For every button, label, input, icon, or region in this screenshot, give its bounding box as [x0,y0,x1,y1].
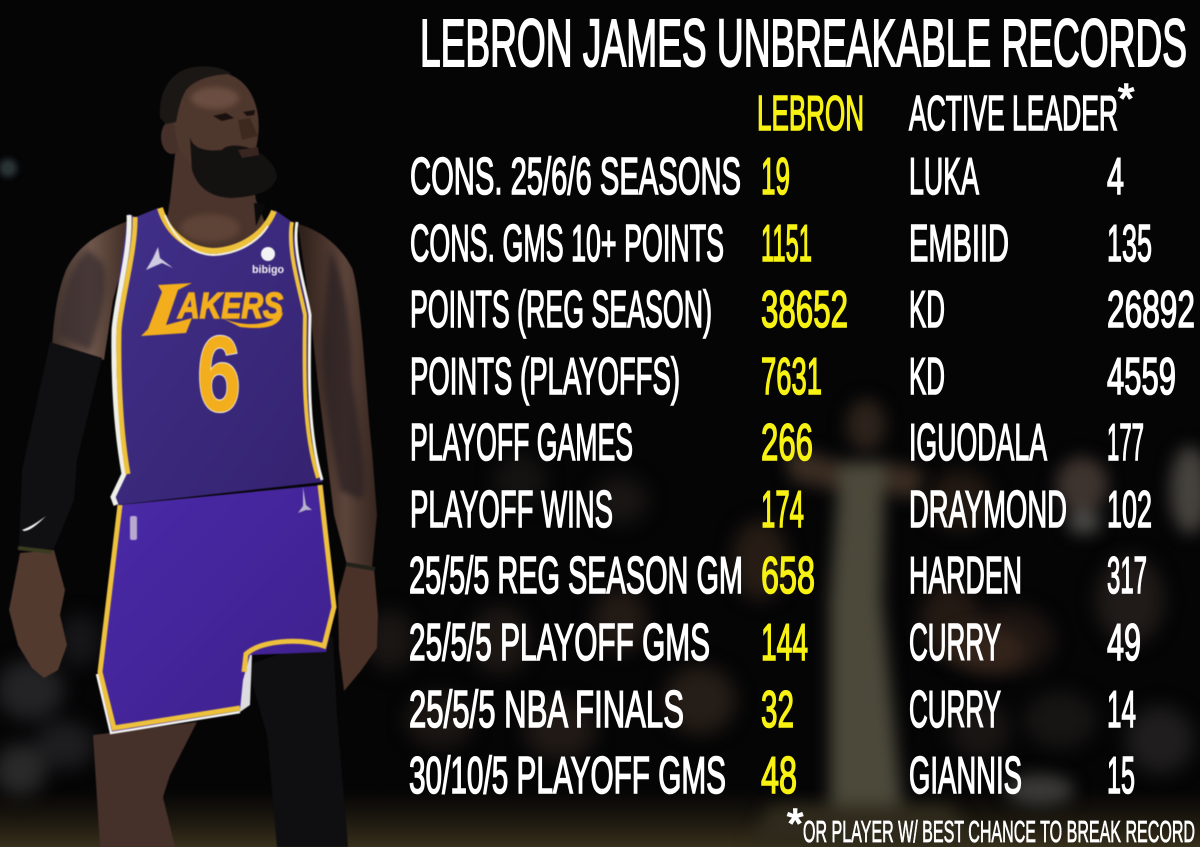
bibigo sponsor logo [252,247,284,276]
row: 30/10/5 playoff gms: GIANNIS [909,747,1022,805]
column header: lebron: LEBRON [757,87,864,141]
row: points (reg season): POINTS (REG SEASON) [410,281,712,339]
row: 25/5/5 nba finals [409,681,1136,739]
chest highlight [180,214,240,242]
mouth [238,147,259,158]
row: cons. gms 10+ points: 135 [1107,215,1152,273]
row: 25/5/5 nba finals: 14 [1107,681,1136,739]
row: cons. 25/6/6 seasons: LUKA [909,148,979,206]
row: playoff wins: 174 [761,481,804,539]
row: 25/5/5 reg season gm: 25/5/5 REG SEASON GM [409,547,743,605]
row: 25/5/5 playoff gms: 49 [1107,614,1141,672]
footnote: * [787,800,803,847]
text: 15 [1107,747,1135,805]
row: 25/5/5 playoff gms: 25/5/5 PLAYOFF GMS [409,614,710,672]
row: points (reg season): 38652 [761,281,848,339]
bibigo sponsor logo: bibigo [252,264,284,276]
row: 25/5/5 nba finals: 32 [761,681,794,739]
face [172,72,259,170]
lakers wordmark [141,283,283,336]
right hand [338,566,378,691]
ear [161,120,183,154]
row: 25/5/5 playoff gms: CURRY [909,614,1001,672]
right armhole trim [296,222,322,480]
neck and chest [165,145,266,258]
row: playoff wins: DRAYMOND [909,481,1067,539]
black undershirt strap [254,203,266,226]
row: playoff games: PLAYOFF GAMES [410,414,633,472]
row: cons. 25/6/6 seasons: CONS. 25/6/6 SEASONS [410,148,741,206]
nose [238,118,258,140]
nike swoosh [22,516,46,531]
row: 30/10/5 playoff gms: 48 [761,747,797,805]
text: 177 [1107,414,1144,472]
lakers wordmark: AKERS [177,285,283,326]
row: playoff wins: 102 [1107,481,1152,539]
column header: active leader [909,75,1134,141]
row: 25/5/5 reg season gm: 658 [761,547,815,605]
jersey number 6: 6 [197,313,241,434]
text: 317 [1107,547,1147,605]
player photo [9,66,378,847]
row: points (playoffs): 7631 [761,348,822,406]
left arm [52,220,130,360]
row: 25/5/5 nba finals: CURRY [909,681,1001,739]
row: cons. 25/6/6 seasons: 4 [1107,148,1124,206]
row: playoff games [410,414,1144,472]
row: points (playoffs): KD [909,348,945,406]
left armhole trim [113,215,129,505]
beard [190,137,277,198]
left hand [9,550,67,678]
row: cons. gms 10+ points: 1151 [761,215,812,273]
eyes [213,113,234,121]
compression sleeve [19,342,102,549]
row: 25/5/5 nba finals: 25/5/5 NBA FINALS [409,681,684,739]
row: cons. gms 10+ points: CONS. GMS 10+ POINTS [410,215,724,273]
forehead highlight [191,87,239,109]
wristband left [18,548,52,552]
head [160,66,277,198]
wristband right [346,564,375,569]
row: 25/5/5 reg season gm: HARDEN [909,547,1022,605]
right arm tattoos [322,250,364,500]
row: points (reg season): KD [909,281,945,339]
row: playoff games: 266 [761,414,813,472]
row: cons. 25/6/6 seasons: 19 [761,148,790,206]
footnote [787,800,1195,847]
row: 30/10/5 playoff gms: 30/10/5 PLAYOFF GMS [409,747,726,805]
hair [160,66,232,124]
row: cons. gms 10+ points: EMBIID [909,215,1009,273]
left thigh [93,722,197,847]
jersey [113,208,323,505]
column header: active leader: * [1118,75,1134,122]
row: playoff wins: PLAYOFF WINS [410,481,613,539]
black leg sleeve [247,636,348,847]
row: points (playoffs) [410,348,1176,406]
blurred spectator [750,399,1200,847]
white gusset [230,650,252,712]
right arm [298,224,377,568]
shorts trim [100,505,240,728]
jordan logo shorts [298,487,312,513]
row: playoff games: IGUODALA [909,414,1047,472]
shorts [97,485,336,733]
row: playoff wins [410,481,1152,539]
collar trim [160,208,274,251]
jordan logo jersey [146,247,173,270]
nba logo [130,516,137,540]
left arm tattoos [58,250,106,350]
row: points (playoffs): POINTS (PLAYOFFS) [410,348,680,406]
row: 25/5/5 playoff gms: 144 [761,614,808,672]
